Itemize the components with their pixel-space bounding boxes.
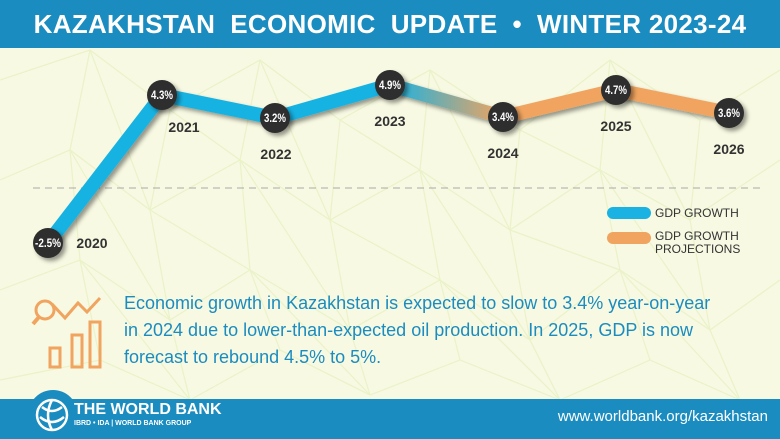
footer bar [0, 399, 780, 439]
title bar: KAZAKHSTAN ECONOMIC UPDATE • WINTER 2023-24 [34, 9, 746, 39]
line chart: 4.3% [151, 88, 173, 102]
icon: growth chart with magnifier [32, 297, 102, 368]
line chart: 4.9% [379, 78, 401, 92]
description text: Economic growth in Kazakhstan is expected to slow to 3.4% year-on-year in 2024 due to lower-than-expected oil production. In 2025, GDP is now forecast to rebound 4.5% to 5%. [124, 293, 710, 367]
logo: world bank: THE WORLD BANK [74, 401, 222, 418]
line chart: 2026 [713, 141, 745, 157]
line chart: 2024 [487, 145, 519, 161]
legend [607, 206, 740, 256]
logo: world bank [34, 390, 222, 432]
footer url: www.worldbank.org/kazakhstan [558, 408, 768, 425]
line chart: 2022 [260, 146, 292, 162]
line chart: -2.5% [35, 236, 61, 250]
line chart: 3.2% [264, 111, 286, 125]
line chart: 2025 [600, 118, 632, 134]
line chart: 2021 [168, 119, 200, 135]
title bar [0, 0, 780, 48]
line chart: 4.7% [605, 83, 627, 97]
legend: GDP GROWTH [655, 229, 739, 243]
line chart: 2020 [76, 235, 108, 251]
legend: GDP GROWTH [655, 206, 739, 220]
line chart: 3.6% [718, 106, 740, 120]
line chart: 2023 [374, 113, 406, 129]
legend: PROJECTIONS [655, 242, 740, 256]
line chart: 3.4% [492, 110, 514, 124]
logo: world bank: IBRD • IDA | WORLD BANK GROUP [74, 420, 191, 427]
